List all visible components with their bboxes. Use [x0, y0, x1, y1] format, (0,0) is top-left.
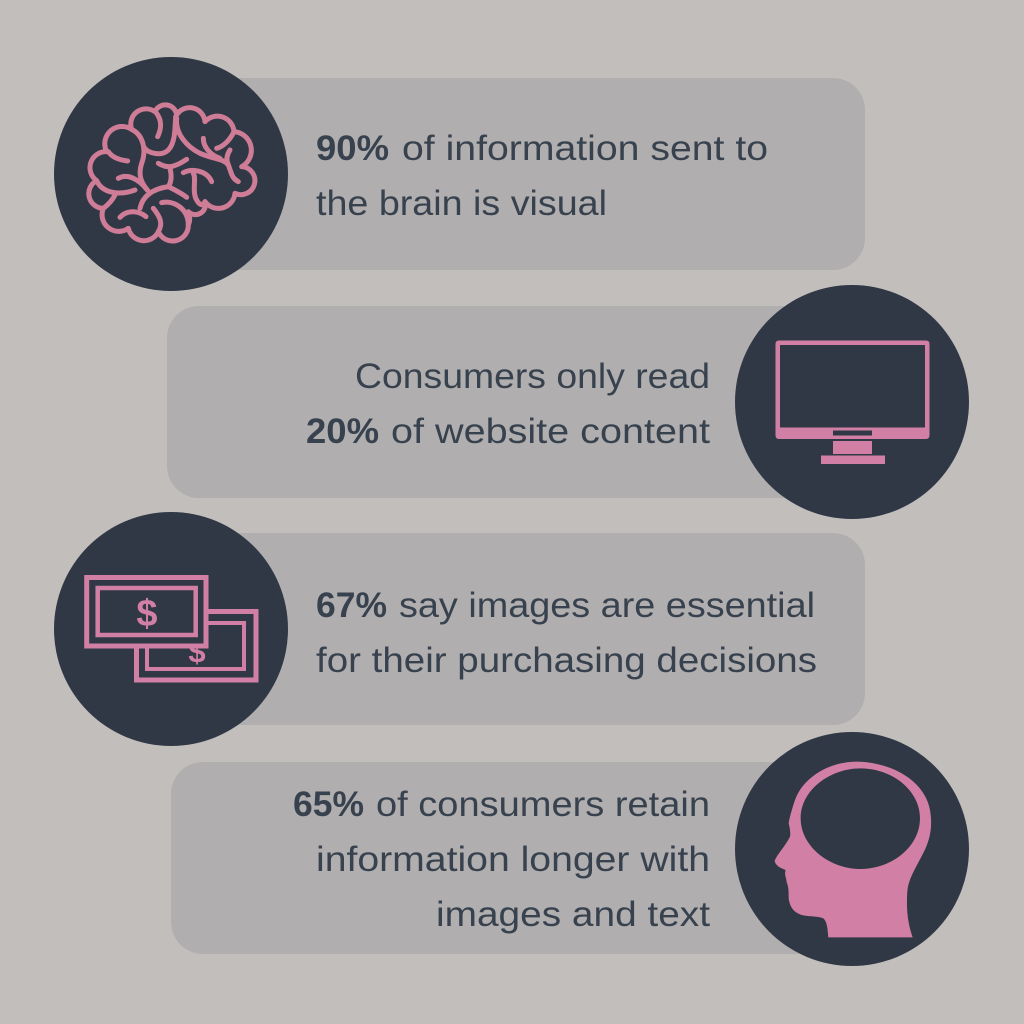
panel: 20% website content	[167, 285, 969, 519]
stat text: 65% of consumers retain: images and text	[436, 895, 710, 934]
stat text: 65% of consumers retain	[293, 785, 710, 934]
stat text: 65% of consumers retain: 65%	[293, 785, 364, 824]
stat text: 67% say images are essential	[316, 586, 817, 680]
stat text: 90% of information: of information sent to	[402, 129, 768, 168]
stat text: 67% say images are essential: for their purchasing decisions	[316, 641, 817, 680]
icon: monitor in circle	[735, 285, 969, 519]
stat text: 90% of information: 90%	[316, 129, 389, 168]
stat text: 20% of website content	[306, 357, 710, 451]
stat text: 67% say images are essential: 67%	[316, 586, 387, 625]
stat text: 67% say images are essential: say images are essential	[399, 586, 815, 625]
stat text: 65% of consumers retain: information longer with	[316, 840, 710, 879]
stat text: 20% of website content: of website content	[391, 412, 710, 451]
panel: 67% images essential	[54, 512, 865, 746]
stat text: 65% of consumers retain: of consumers retain	[376, 785, 710, 824]
stat text: 20% of website content: Consumers only read	[355, 357, 710, 396]
icon: brain in circle	[54, 57, 288, 291]
icon: banknotes in circle: $	[188, 634, 206, 669]
stat text: 90% of information: the brain is visual	[316, 184, 607, 223]
panel: 65% retain information	[171, 732, 969, 966]
stat text: 20% of website content: 20%	[306, 412, 379, 451]
icon: banknotes in circle: $	[136, 593, 158, 635]
stat text: 90% of information	[316, 129, 768, 223]
icon: head profile in circle	[735, 732, 969, 966]
icon: banknotes in circle	[54, 512, 288, 746]
panel: 90% visual	[54, 57, 865, 291]
